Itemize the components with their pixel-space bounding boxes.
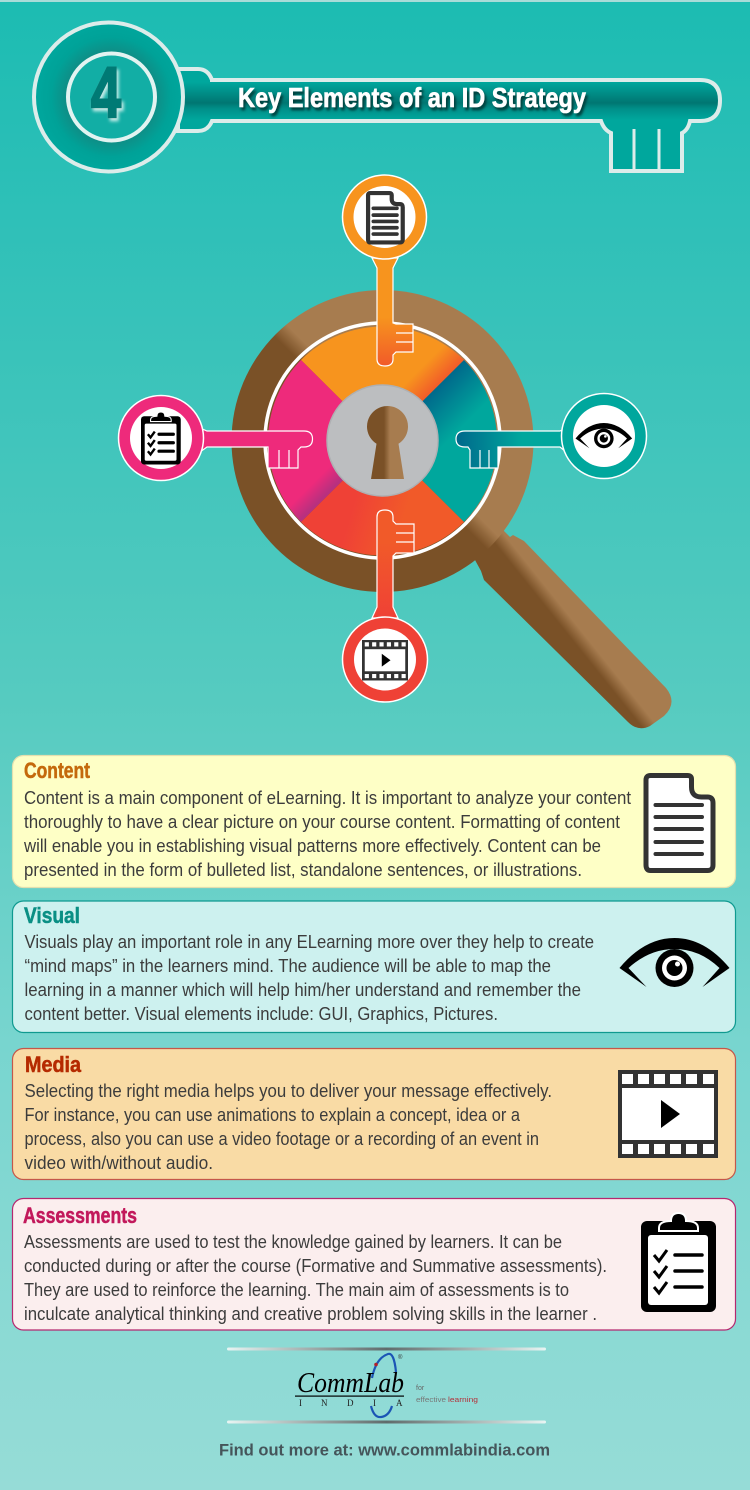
- icon: eye: [620, 938, 730, 987]
- key: content: [342, 175, 426, 366]
- text: assessments body: inculcate analytical thinking and creative problem solving skills in the learner .: [24, 1304, 597, 1324]
- logo: CommLab India: A: [396, 1398, 403, 1408]
- text: content body: will enable you in establishing visual patterns more effectively. Content can be: [23, 836, 601, 856]
- text: visual body: content better. Visual elements include: GUI, Graphics, Pictures.: [24, 1004, 498, 1024]
- text: content body: presented in the form of bulleted list, standalone sentences, or illustrations.: [24, 860, 582, 880]
- icon: clipboard: [641, 1213, 716, 1312]
- text: visual body: learning in a manner which will help him/her understand and remember the: [24, 980, 581, 1000]
- text: media body: process, also you can use a video footage or a recording of an event in: [24, 1129, 539, 1149]
- logo: CommLab India: I: [373, 1398, 376, 1408]
- heading: visual: Visual: [24, 903, 80, 928]
- magnifier ring: [232, 290, 534, 592]
- panel: media: [12, 1048, 736, 1180]
- logo: CommLab India: [295, 1354, 478, 1417]
- lens: media sector: [301, 441, 464, 555]
- text: assessments body: They are used to reinforce the learning. The main aim of assessments is to: [24, 1280, 569, 1300]
- logo: CommLab India: ®: [398, 1354, 403, 1361]
- footer link text: Find out more at: www.commlabindia.com: [219, 1440, 550, 1460]
- lens: content sector: [301, 327, 464, 441]
- key: visual: [456, 394, 646, 478]
- key: media: [342, 510, 428, 702]
- text: content body: Content is a main component of eLearning. It is important to analyze your content: [24, 788, 631, 808]
- text: assessments body: conducted during or after the course (Formative and Summative assessments).: [24, 1256, 607, 1276]
- lens: visual sector: [382, 360, 497, 522]
- heading: assessments: Assessments: [23, 1203, 137, 1228]
- logo: CommLab India: I: [299, 1398, 302, 1408]
- logo: CommLab India: effective: [416, 1395, 446, 1404]
- text: visual body: “mind maps” in the learners mind. The audience will be able to map the: [24, 956, 551, 976]
- keyhole: [367, 406, 408, 479]
- logo: CommLab India: CommLab: [297, 1367, 404, 1399]
- icon: clipboard small: [141, 412, 181, 464]
- panel: assessments: [12, 1198, 736, 1330]
- text: media body: [24, 1081, 552, 1173]
- title: Key Elements of an ID Strategy: [238, 82, 586, 113]
- key: assessments: [118, 396, 312, 480]
- heading: media: Media: [25, 1052, 82, 1077]
- panel: content: [12, 756, 736, 888]
- text: visual body: Visuals play an important role in any ELearning more over they help to create: [24, 932, 594, 952]
- magnifier handle: [475, 527, 672, 728]
- logo: CommLab India: learning: [448, 1395, 478, 1404]
- text: content body: thoroughly to have a clear picture on your course content. Formatting of content: [24, 812, 620, 832]
- icon: eye small: [576, 423, 632, 448]
- keyhole plate: [327, 385, 438, 496]
- number 4: 4: [91, 54, 121, 133]
- icon: film small: [362, 640, 408, 680]
- heading: content: Content: [24, 758, 91, 783]
- text: assessments body: [24, 1232, 607, 1324]
- magnifying glass illustration: [118, 175, 672, 728]
- text: visual body: [24, 932, 594, 1024]
- text: media body: Selecting the right media helps you to deliver your message effectively.: [24, 1081, 552, 1101]
- icon: film: [618, 1070, 718, 1158]
- title key banner: [34, 22, 720, 172]
- text: content body: [23, 788, 631, 880]
- icon: document small: [368, 193, 403, 242]
- text: assessments body: Assessments are used to test the knowledge gained by learners. It can be: [24, 1232, 562, 1252]
- logo: CommLab India: for: [416, 1385, 425, 1392]
- lens: assessments sector: [268, 360, 382, 522]
- text: media body: For instance, you can use animations to explain a concept, idea or a: [24, 1105, 521, 1125]
- panel: visual: [12, 901, 736, 1032]
- icon: document: [646, 776, 713, 870]
- logo: CommLab India: N: [321, 1398, 328, 1408]
- logo: CommLab India: D: [347, 1398, 354, 1408]
- text: media body: video with/without audio.: [24, 1153, 213, 1173]
